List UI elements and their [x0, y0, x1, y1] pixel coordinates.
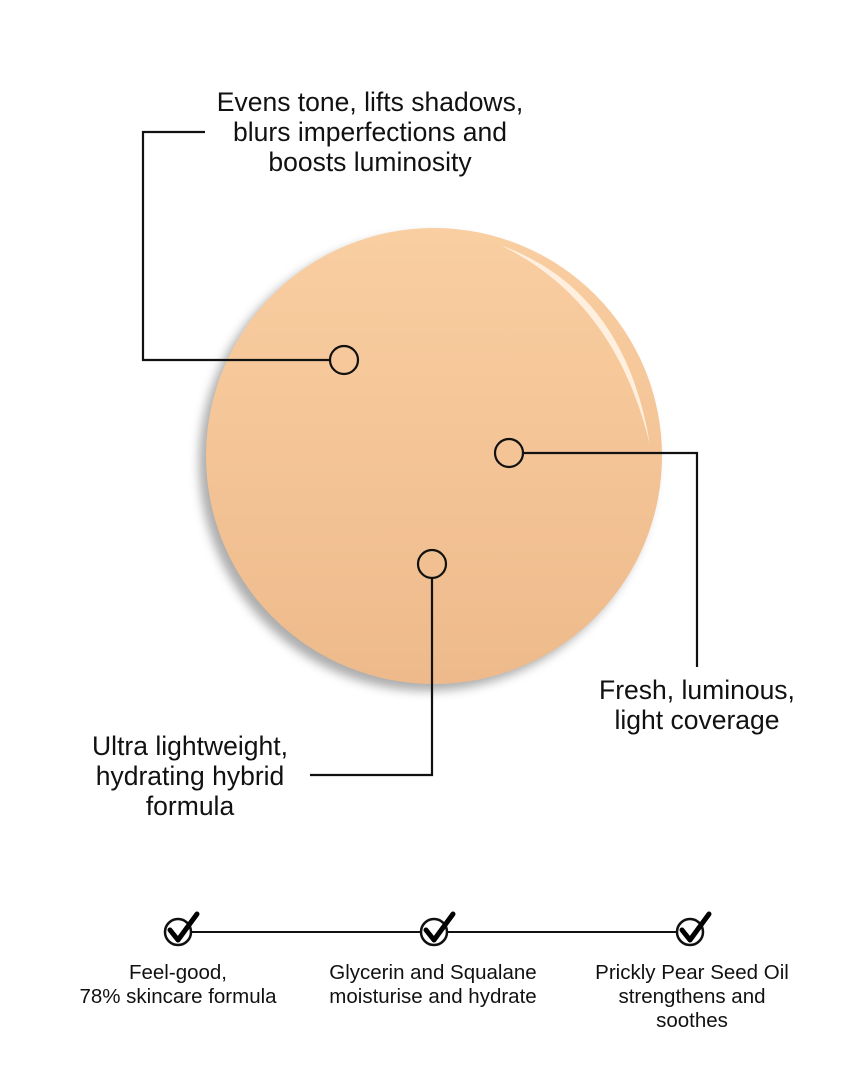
benefit 1: Feel-good, [129, 961, 227, 984]
text: tone [217, 87, 523, 177]
callout line: formula [310, 550, 446, 775]
foundation swatch [199, 228, 662, 691]
benefit 1 [79, 961, 277, 1008]
text: coverage: Fresh, luminous, [599, 675, 795, 705]
callout line: coverage [495, 439, 697, 667]
text: coverage: light coverage [614, 705, 780, 735]
benefit 2: Glycerin and Squalane [329, 961, 537, 984]
check timeline [165, 914, 709, 945]
text: tone: Evens tone, lifts shadows, [217, 87, 523, 117]
text: formula [92, 731, 288, 821]
benefit 3: strengthens and [618, 985, 766, 1008]
text: coverage [599, 675, 795, 735]
text: formula: formula [146, 791, 234, 821]
text: formula: hydrating hybrid [96, 761, 284, 791]
benefit 2: moisturise and hydrate [329, 985, 537, 1008]
benefit 3: soothes [656, 1009, 728, 1032]
callout line: tone [143, 132, 358, 374]
benefit 1: 78% skincare formula [79, 985, 277, 1008]
benefit 3 [595, 961, 789, 1032]
text: tone: blurs imperfections and [233, 117, 507, 147]
benefit 2 [329, 961, 537, 1008]
text: formula: Ultra lightweight, [92, 731, 288, 761]
benefit 3: Prickly Pear Seed Oil [595, 961, 789, 984]
text: tone: boosts luminosity [268, 147, 472, 177]
